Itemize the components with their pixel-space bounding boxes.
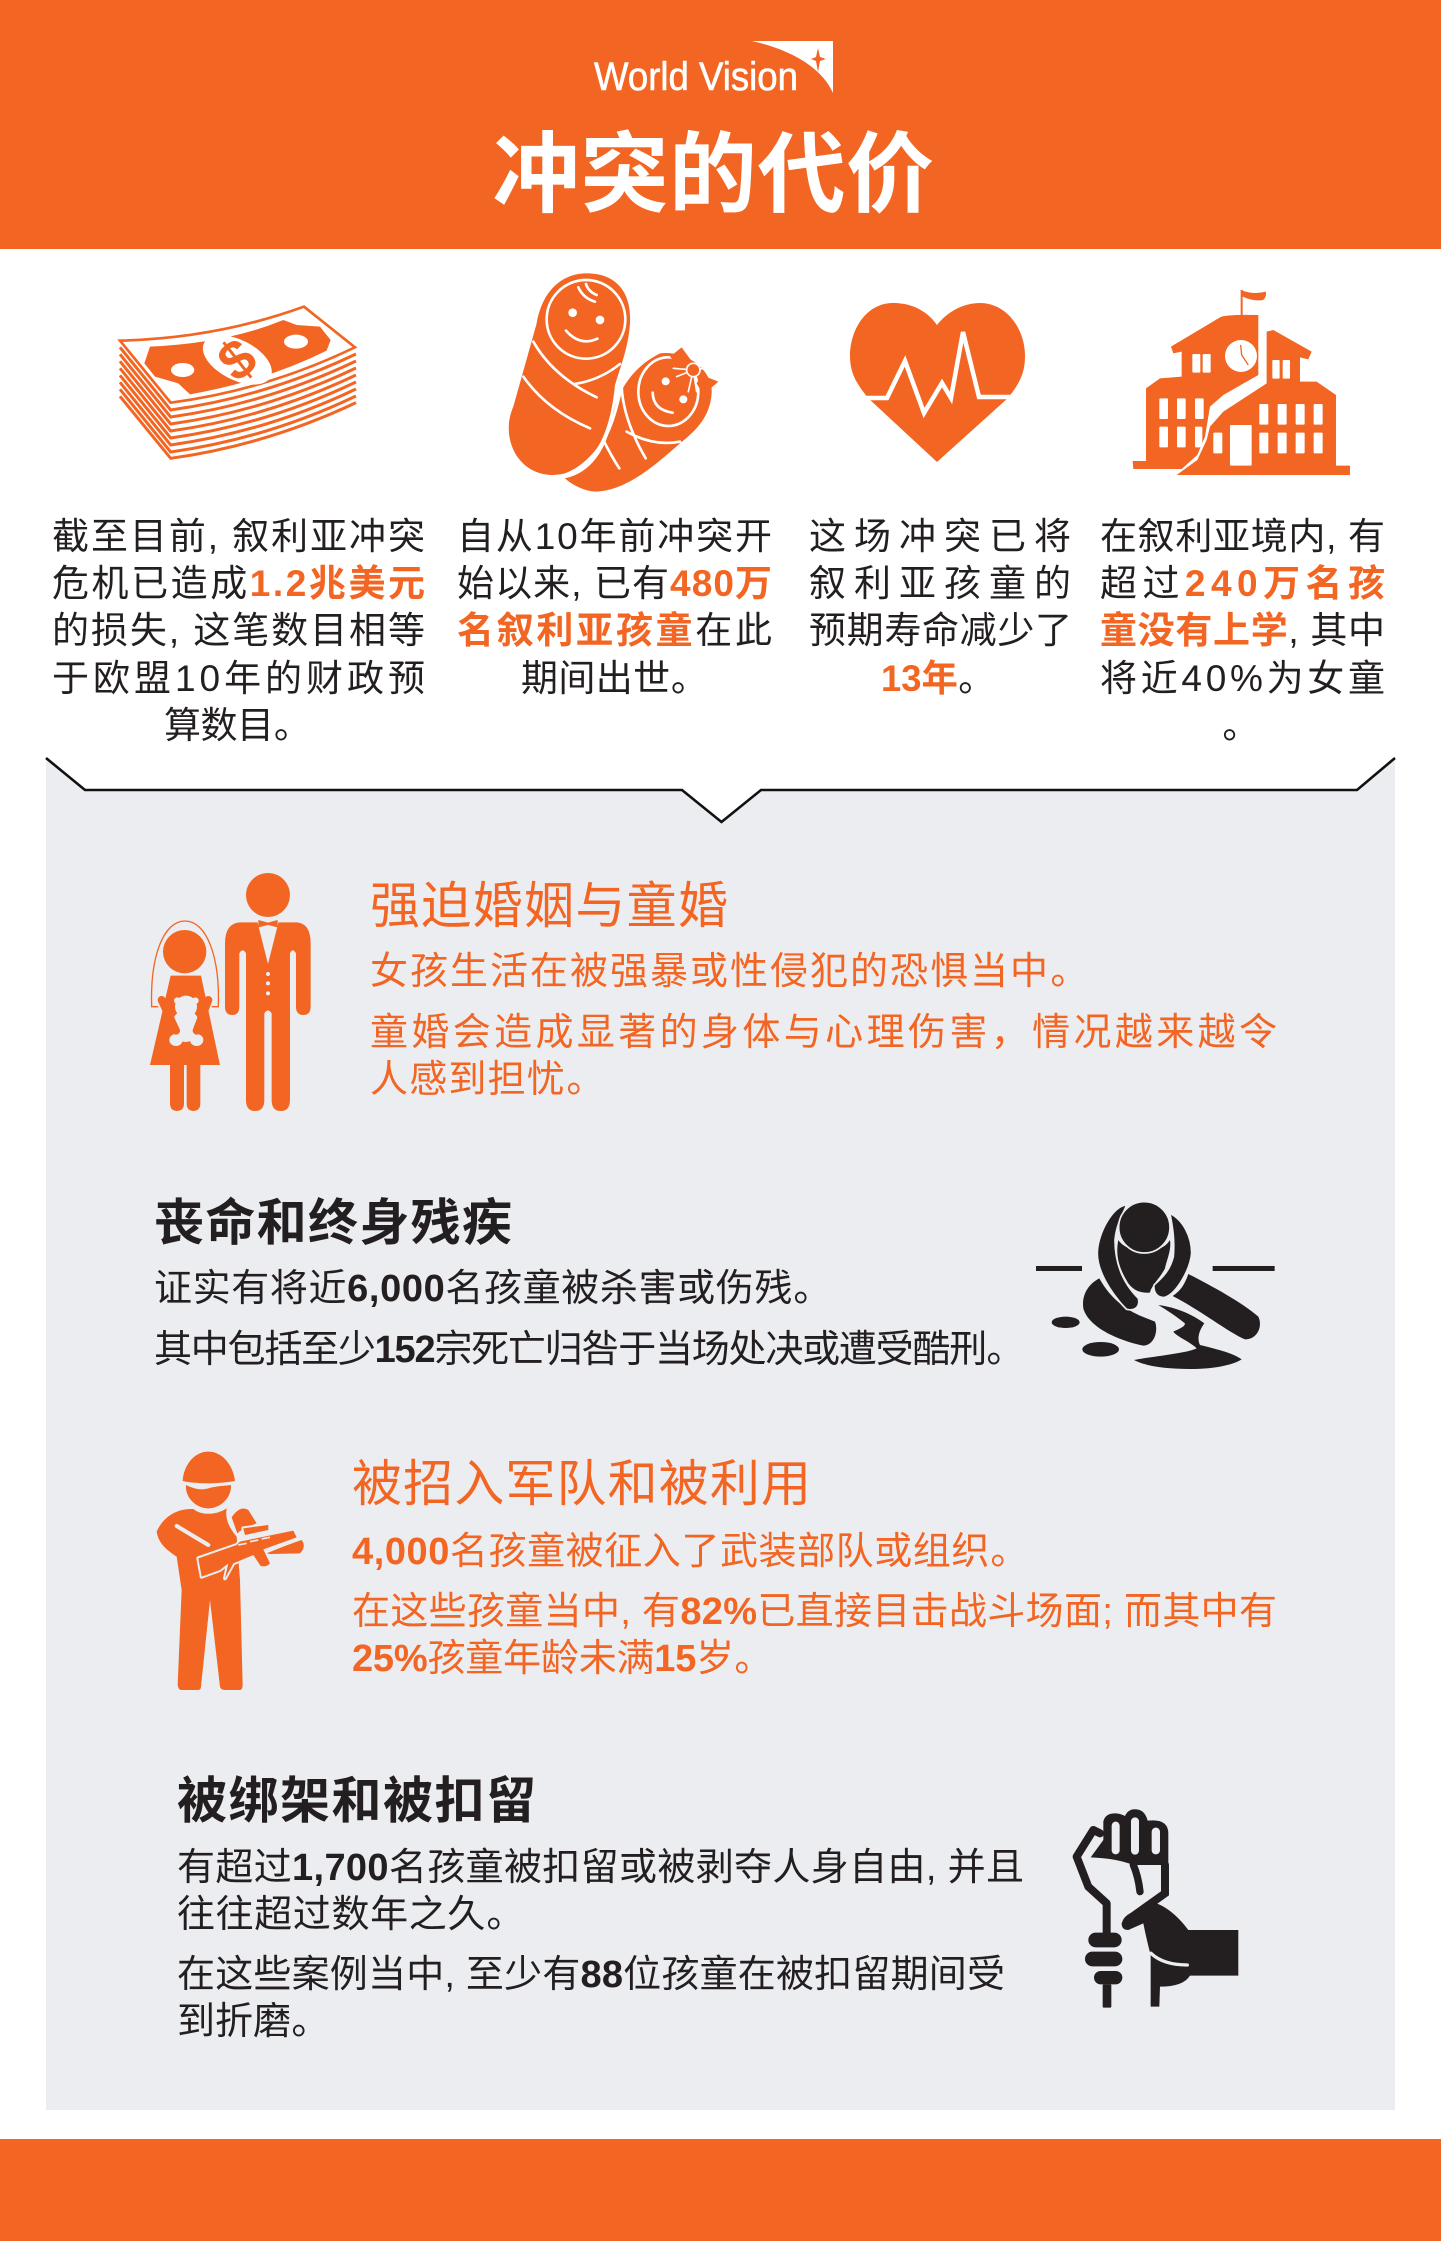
paragraph line: 25%孩童年龄未满15岁。 — [352, 1638, 753, 1680]
icon: injured person with blood — [1036, 1202, 1275, 1369]
heading: 丧命和终身残疾 — [154, 1195, 512, 1251]
title: 冲突的代价 — [492, 125, 934, 224]
icon: child soldier — [157, 1452, 304, 1690]
heading: 被绑架和被扣留 — [177, 1773, 536, 1829]
paragraph line: 女孩生活在被强暴或性侵犯的恐惧当中。 — [370, 951, 1069, 993]
header band — [0, 0, 1441, 249]
text: schooling line 2: 超过240万名孩 — [1100, 563, 1385, 604]
text: life expectancy line 2: 叙利亚孩童的 — [809, 563, 1071, 604]
paragraph line: 有超过1,700名孩童被扣留或被剥夺人身自由, 并且 — [177, 1847, 1024, 1889]
footer band — [0, 2139, 1441, 2241]
panel top outline — [46, 758, 1395, 822]
section 3: recruitment — [352, 1456, 1277, 1680]
paragraph line: 其中包括至少152宗死亡归咎于当场处决或遭受酷刑。 — [154, 1329, 1005, 1371]
icon: stack of money: $ — [206, 326, 268, 393]
text: schooling line 1: 在叙利亚境内, 有 — [1100, 516, 1385, 557]
World Vision logo: World Vision — [594, 55, 798, 99]
text: life expectancy line 4: 13年。 — [881, 658, 976, 699]
section 1: forced marriage — [370, 878, 1277, 1101]
text: births line 1: 自从10年前冲突开 — [457, 516, 772, 557]
icon: heart with pulse — [850, 303, 1025, 462]
text: life expectancy line 1: 这场冲突已将 — [809, 516, 1071, 557]
paragraph line: 童婚会造成显著的身体与心理伤害，情况越来越令 — [370, 1012, 1277, 1054]
paragraph line: 往往超过数年之久。 — [177, 1894, 505, 1936]
icon: damaged school — [1133, 290, 1350, 475]
text: life expectancy line 3: 预期寿命减少了 — [809, 610, 1072, 651]
text: cost of war line 2: 危机已造成1.2兆美元 — [52, 563, 425, 604]
text: cost of war line 4: 于欧盟10年的财政预 — [52, 658, 425, 699]
heading: 强迫婚姻与童婚 — [370, 878, 728, 934]
text: births line 3: 名叙利亚孩童在此 — [457, 610, 772, 651]
paragraph line: 到折磨。 — [177, 2001, 310, 2043]
text: schooling line 5: 。 — [1222, 705, 1240, 746]
text: births line 2: 始以来, 已有480万 — [457, 563, 772, 604]
icon: gripped fist — [1077, 1809, 1238, 2008]
icon: child bride and groom — [150, 873, 311, 1111]
text: schooling line 4: 将近40%为女童 — [1100, 658, 1385, 699]
section 4: abduction and detention — [177, 1773, 1024, 2043]
paragraph line: 4,000名孩童被征入了武装部队或组织。 — [352, 1531, 1009, 1573]
paragraph line: 在这些孩童当中, 有82%已直接目击战斗场面; 而其中有 — [352, 1591, 1277, 1633]
heading: 被招入军队和被利用 — [352, 1456, 811, 1512]
paragraph line: 证实有将近6,000名孩童被杀害或伤残。 — [154, 1268, 812, 1310]
icon: stack of money — [120, 307, 356, 458]
text: schooling line 3: 童没有上学, 其中 — [1100, 610, 1385, 651]
section 2: deaths and disability — [154, 1195, 1005, 1371]
text: cost of war line 3: 的损失, 这笔数目相等 — [52, 610, 425, 651]
paragraph line: 在这些案例当中, 至少有88位孩童在被扣留期间受 — [177, 1954, 1005, 1996]
text: cost of war: 截至目前, 叙利亚冲突 — [52, 516, 425, 557]
panel: grey impacts background with notched top — [46, 758, 1395, 2110]
text: births line 4: 期间出世。 — [521, 658, 689, 699]
text: cost of war line 5: 算数目。 — [164, 705, 292, 746]
paragraph line: 人感到担忧。 — [370, 1059, 585, 1101]
icon: swaddled babies — [509, 273, 718, 492]
